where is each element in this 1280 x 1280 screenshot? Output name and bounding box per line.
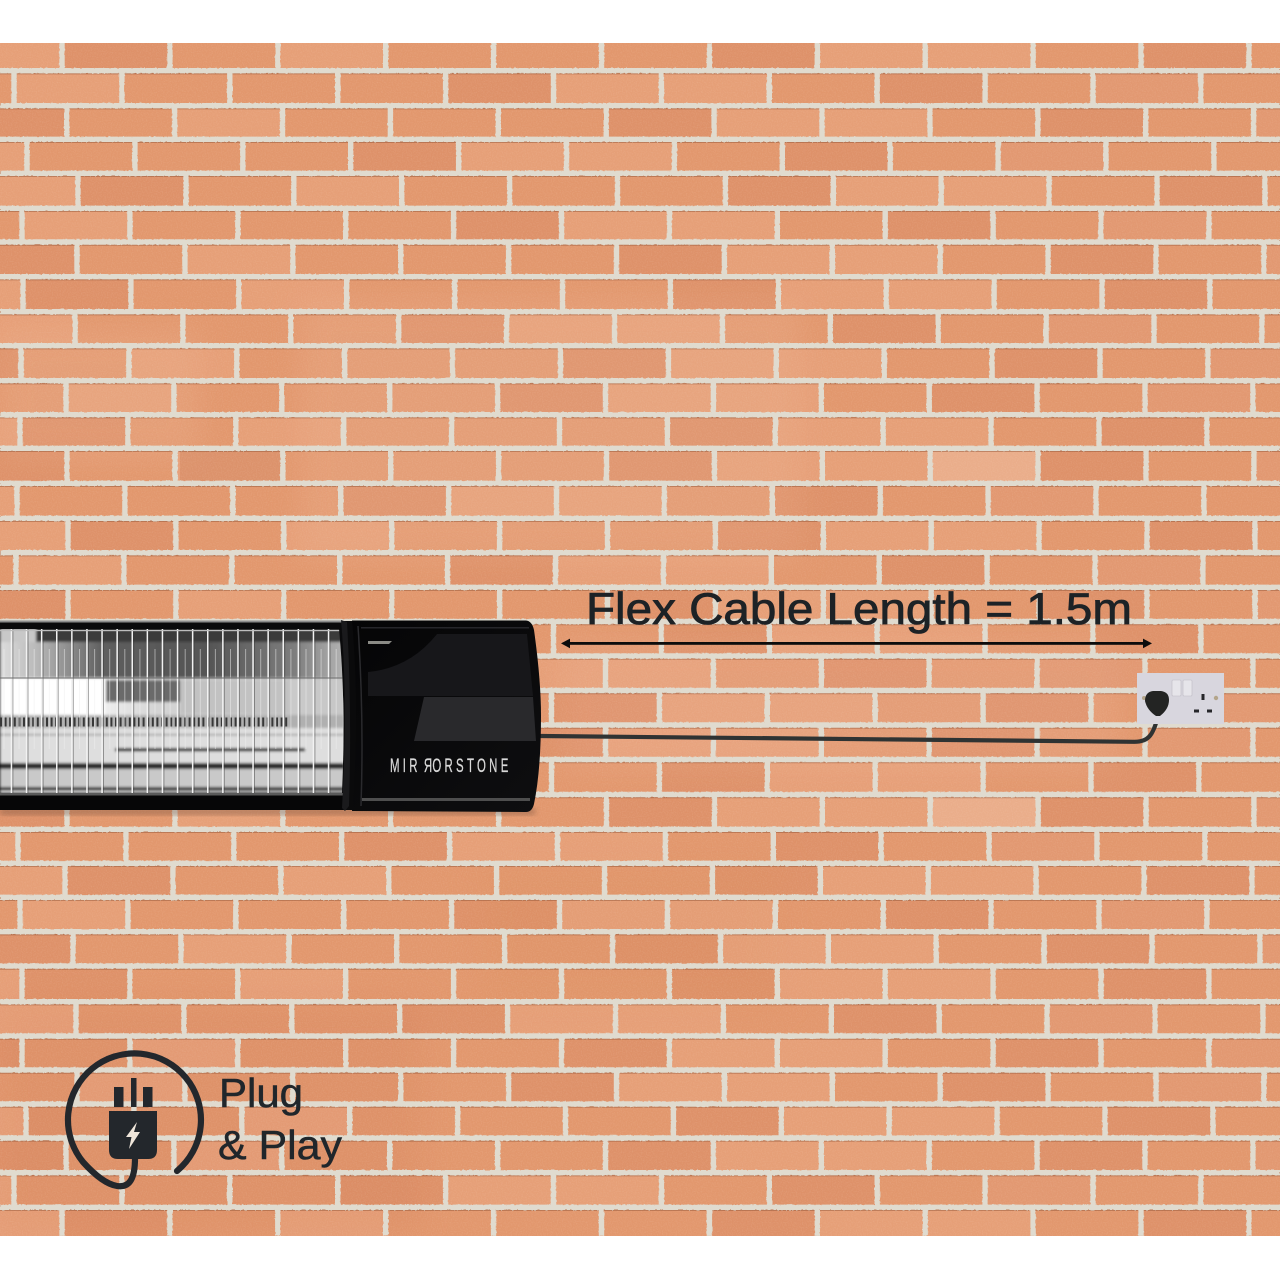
text: plug and play: Plug (219, 1070, 303, 1116)
logo: mirrorstone: MIR ORSTONE (390, 756, 512, 777)
end cap (352, 620, 541, 812)
arrow: cable length dimension (561, 639, 1152, 648)
lower trim (0, 793, 344, 796)
power cable (541, 716, 1158, 742)
logo: mirrorstone: R (421, 756, 432, 777)
heater body (0, 621, 357, 810)
heater (0, 620, 541, 815)
end joint (341, 620, 350, 811)
cap reflections (368, 634, 533, 696)
heater shadow (0, 808, 535, 815)
brick tone variation (13, 316, 1108, 757)
heating coil (0, 718, 288, 726)
heading: flex cable length: Flex Cable Length = 1.5m (586, 585, 1132, 634)
grille wires (0, 629, 346, 793)
reflector (0, 628, 346, 793)
plug on socket (1145, 691, 1169, 716)
specific pale and dark bricks (180, 449, 1038, 829)
text: plug and play: & Play (218, 1122, 343, 1168)
icon: plug and play (68, 1053, 201, 1186)
text: plug and play (218, 1070, 343, 1168)
wall socket (1137, 673, 1224, 724)
